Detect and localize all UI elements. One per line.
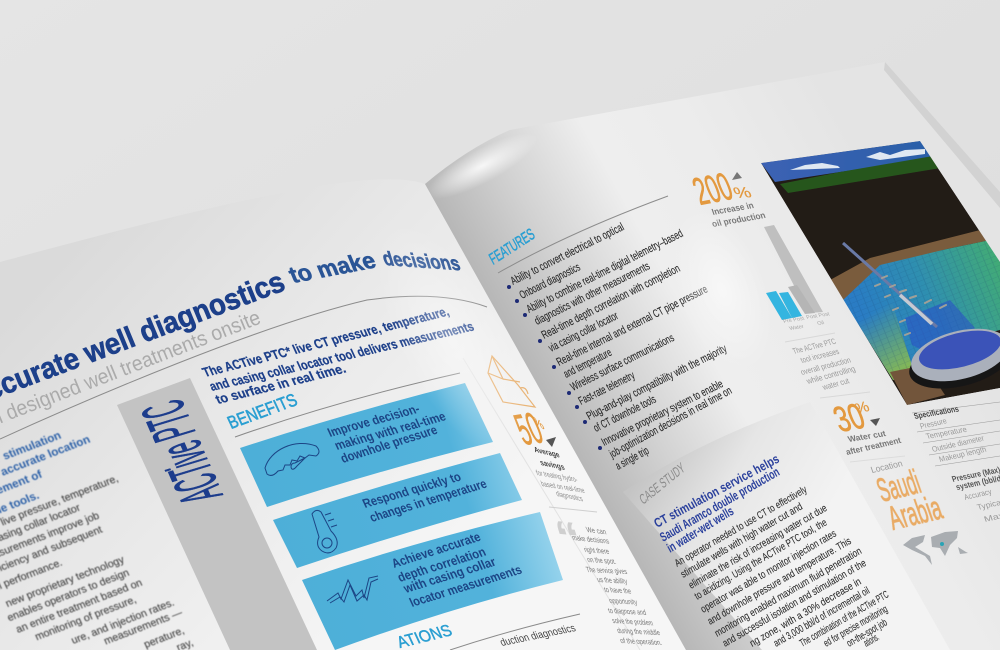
feature lines: job-optimization decisions in real time on	[607, 385, 734, 461]
benefit text: pressure: making with real-time	[332, 409, 448, 453]
chart labels: Oil	[816, 320, 825, 327]
photo base soil	[761, 141, 1000, 405]
case study body	[673, 484, 891, 650]
lower rock	[890, 365, 945, 405]
case study body: An operator needed to use CT to effectively	[673, 484, 810, 570]
quote mark: “	[549, 512, 589, 565]
savings caption: based on real-time	[540, 479, 586, 495]
specification rows: Makeup length	[938, 445, 987, 464]
icon: gauge	[265, 443, 319, 475]
left column paragraph two: measurements —	[102, 607, 185, 647]
case study body: eliminate the risk of increasing water cut due	[687, 503, 829, 592]
page outer edge shading	[884, 62, 1000, 208]
case study body: operator was able to monitor injection rates	[699, 528, 839, 616]
left column paragraph one: live pressure, temperature,	[0, 473, 120, 528]
location name: Saudi	[872, 463, 925, 510]
chart labels: Pre Post	[782, 316, 806, 325]
left text column	[0, 430, 195, 650]
tool basin	[911, 328, 1000, 382]
fracture fan	[905, 300, 975, 349]
200 percent caption: oil production	[710, 210, 767, 229]
feature lines: via casing collar locator	[547, 310, 621, 355]
left column paragraph two: an entire treatment based on	[14, 577, 144, 636]
sky	[761, 141, 933, 182]
stat: 30 percent	[828, 396, 902, 457]
customer quote: solve the problem	[611, 616, 654, 627]
case study body: and downhole pressure and temperature. This	[706, 536, 853, 628]
benefit text: temperature: changes in temperature	[367, 476, 489, 525]
savings caption: Average	[532, 444, 561, 460]
chart labels: Post Post	[805, 312, 831, 321]
feature lines: a single trip	[614, 445, 651, 473]
customer quote: make decisions	[571, 533, 610, 546]
customer quote: us the ability	[596, 575, 628, 586]
location marker	[940, 542, 944, 546]
case study body: to acidizing. Using the ACTive PTC tool, the	[693, 517, 829, 603]
case study body: stimulate wells with high water cut and	[679, 501, 805, 581]
feature lines: Ability to convert electrical to optical	[509, 221, 626, 288]
feature lines: Fast-rate telemetry	[577, 370, 637, 408]
bar: post oil	[764, 225, 823, 313]
feature lines: and temperature	[562, 347, 614, 381]
title line middle: to make	[285, 248, 380, 289]
benefit text: temperature: Respond quickly to	[360, 469, 463, 511]
sidebar divider	[463, 358, 640, 650]
customer quote: on the spot.	[586, 555, 617, 566]
left column lead	[0, 430, 92, 532]
percent sign: %	[731, 185, 754, 202]
sidebar: savings and quote	[463, 356, 663, 650]
specifications table	[912, 402, 1000, 524]
case study body: on-the-spot job	[845, 617, 889, 650]
features list	[507, 221, 734, 473]
arrow down	[546, 437, 556, 447]
200 percent caption	[710, 200, 767, 229]
feature lines: Real-time depth correlation with completion	[540, 263, 682, 342]
chart caption	[791, 336, 857, 392]
panel: left page: ACTive PTC	[129, 393, 235, 511]
chart caption: tool increases	[799, 346, 841, 365]
benefits heading: BENEFITS	[224, 390, 300, 433]
case study body: ations.	[862, 632, 881, 650]
case study heading: in water-wet wells	[664, 503, 736, 556]
glare over features text	[652, 196, 792, 384]
icon: envelope	[488, 356, 535, 407]
customer quote: during the middle	[616, 626, 662, 637]
percent sign: %	[852, 398, 872, 418]
specifications heading: Specifications	[912, 404, 960, 421]
30 percent caption: Water cut	[846, 428, 887, 444]
left page sheet	[0, 179, 686, 650]
reservoir heatmap	[843, 238, 1000, 380]
image: well and reservoir illustration	[761, 141, 1000, 405]
features heading: FEATURES	[487, 226, 538, 269]
feature lines: Real-time internal and external CT pipe pressure	[555, 284, 710, 369]
left column paragraph two: enables operators to design	[5, 567, 131, 624]
reservoir cells	[843, 238, 1000, 380]
case study heading: Saudi Aramco double production	[657, 464, 782, 545]
customer quote: to diagnose and	[607, 606, 647, 617]
feature lines: Wireless surface communications	[569, 332, 677, 394]
case study heading: CT stimulation service helps	[651, 451, 782, 531]
feature lines: Plug-and-play compatibility with the majority	[585, 343, 729, 423]
customer quote: opportunity	[608, 596, 638, 607]
bar: pre oil	[779, 292, 802, 318]
chart caption: water cut	[820, 376, 851, 392]
feature lines: diagnostics with other measurements	[533, 260, 652, 328]
customer quote: The service gives	[585, 565, 628, 576]
gutter glare	[419, 122, 545, 210]
applications text: duction diagnostics	[498, 623, 578, 649]
customer quote: of the operation.	[619, 636, 663, 647]
arrow up	[732, 172, 742, 180]
chart labels: Water	[788, 324, 805, 332]
case study heading	[651, 451, 782, 556]
feature lines: of CT downhole tools	[592, 394, 658, 435]
specification rows	[919, 416, 987, 464]
bullets	[507, 285, 602, 450]
title line end: decisions	[380, 248, 463, 275]
pressure rows: Max	[983, 511, 1000, 524]
stat: 200 percent	[687, 166, 767, 229]
benefit text: pressure: Improve decision-	[325, 401, 422, 440]
bar chart: production	[764, 225, 831, 332]
intro paragraph	[200, 304, 476, 407]
location name second line: Arabia	[883, 489, 947, 538]
left column paragraph two: new proprietary technology	[4, 554, 127, 610]
feature lines	[509, 221, 734, 473]
customer quote	[571, 525, 663, 647]
case study body: and 3,000 bbl/d of incremental oil	[772, 585, 872, 650]
case study label: CASE STUDY	[637, 459, 687, 508]
200 percent caption: Increase in	[710, 200, 755, 217]
intro paragraph: The ACTive PTC* live CT pressure, temperature,	[200, 304, 451, 380]
specification rows: Temperature	[925, 425, 969, 441]
benefit text: depth correlation: locator measurements	[407, 562, 524, 610]
icon: world map	[903, 531, 968, 565]
customer quote: to have the	[603, 585, 633, 596]
brown rock layer	[831, 230, 986, 300]
figure 50: 50	[508, 404, 549, 454]
30 percent caption: after treatment	[844, 435, 902, 457]
tool basin shadow	[909, 362, 1000, 388]
figure 30: 30	[828, 396, 870, 439]
feature lines: Innovative proprietary system to enable	[600, 378, 725, 449]
benefit text: pressure	[325, 401, 448, 466]
panel: case study	[623, 402, 950, 650]
savings caption	[532, 444, 586, 503]
savings caption: savings	[538, 457, 566, 472]
left column paragraph one	[0, 473, 120, 598]
left column paragraph two: ure, and injection rates.	[69, 597, 176, 647]
pressure rows	[963, 487, 1000, 524]
perforation streaks	[875, 276, 946, 335]
stat: 50 percent	[508, 404, 549, 454]
percent sign: %	[530, 413, 546, 433]
savings caption: diagnostics	[555, 489, 584, 503]
savings caption: for treating hydro-	[535, 468, 579, 484]
chart caption: while controlling	[804, 364, 857, 386]
specification rows: Outside diameter	[931, 434, 986, 454]
case study body: The combination of the ACTive PTC	[798, 589, 891, 650]
location label: Location	[869, 458, 904, 475]
case study body: ng zone, with a 30% decrease in	[748, 576, 863, 650]
feature lines: Onboard diagnostics	[518, 262, 583, 302]
specification rows: Pressure	[919, 416, 948, 431]
chart caption: The ACTive PTC	[791, 336, 837, 356]
right page sheet	[425, 62, 1000, 650]
wellbore pipe	[843, 243, 937, 327]
reservoir yellow-green	[860, 308, 912, 380]
left column paragraph two: perature,	[142, 625, 186, 650]
intro paragraph: and casing collar locator tool delivers measurements	[207, 319, 476, 394]
chart caption: overall production	[799, 355, 853, 377]
pressure rows: Accuracy	[963, 487, 993, 502]
grass	[780, 156, 947, 193]
page heading	[0, 248, 463, 451]
bar: pre water	[766, 291, 792, 320]
case study body: ed for precise monitoring	[822, 604, 890, 650]
benefit card: temperature	[273, 453, 522, 568]
benefit text: depth correlation: with casing collar	[400, 554, 498, 596]
intro paragraph: to surface in real time.	[213, 361, 348, 407]
case study body: monitoring enabled maximum fluid penetration	[713, 546, 864, 640]
benefit text: depth correlation	[389, 529, 524, 610]
grey band with product name	[117, 378, 317, 650]
benefit card: depth correlation	[302, 512, 563, 650]
customer quote: right there	[583, 545, 611, 556]
glare over left page gutter	[345, 201, 559, 479]
customer quote: We can	[585, 525, 607, 536]
basin fluid	[919, 330, 1000, 370]
bar: post water	[788, 285, 815, 314]
panel: right page	[419, 62, 1000, 650]
location block	[869, 458, 968, 565]
left column paragraph two	[4, 554, 195, 650]
icon: thermometer	[312, 510, 337, 553]
illustration layers	[761, 141, 1000, 405]
tool section	[900, 295, 932, 324]
benefit text: depth correlation: Achieve accurate	[389, 529, 483, 571]
figure 200: 200	[687, 166, 739, 213]
feature lines: Ability to combine real-time digital telemetry–based	[525, 228, 685, 316]
arrow down	[870, 418, 880, 426]
benefit card: pressure	[240, 383, 493, 507]
icon: zigzag signal	[327, 576, 378, 603]
left column paragraph two: monitoring of pressure,	[33, 594, 138, 643]
mountains	[790, 149, 925, 170]
panel: left page	[0, 179, 686, 650]
benefit text: pressure: downhole pressure	[338, 422, 440, 466]
chart labels	[782, 312, 831, 332]
case study background	[623, 402, 950, 650]
benefit text: depth correlation: depth correlation	[395, 544, 488, 585]
case study body: and successful isolation and stimulation of the	[721, 558, 868, 650]
